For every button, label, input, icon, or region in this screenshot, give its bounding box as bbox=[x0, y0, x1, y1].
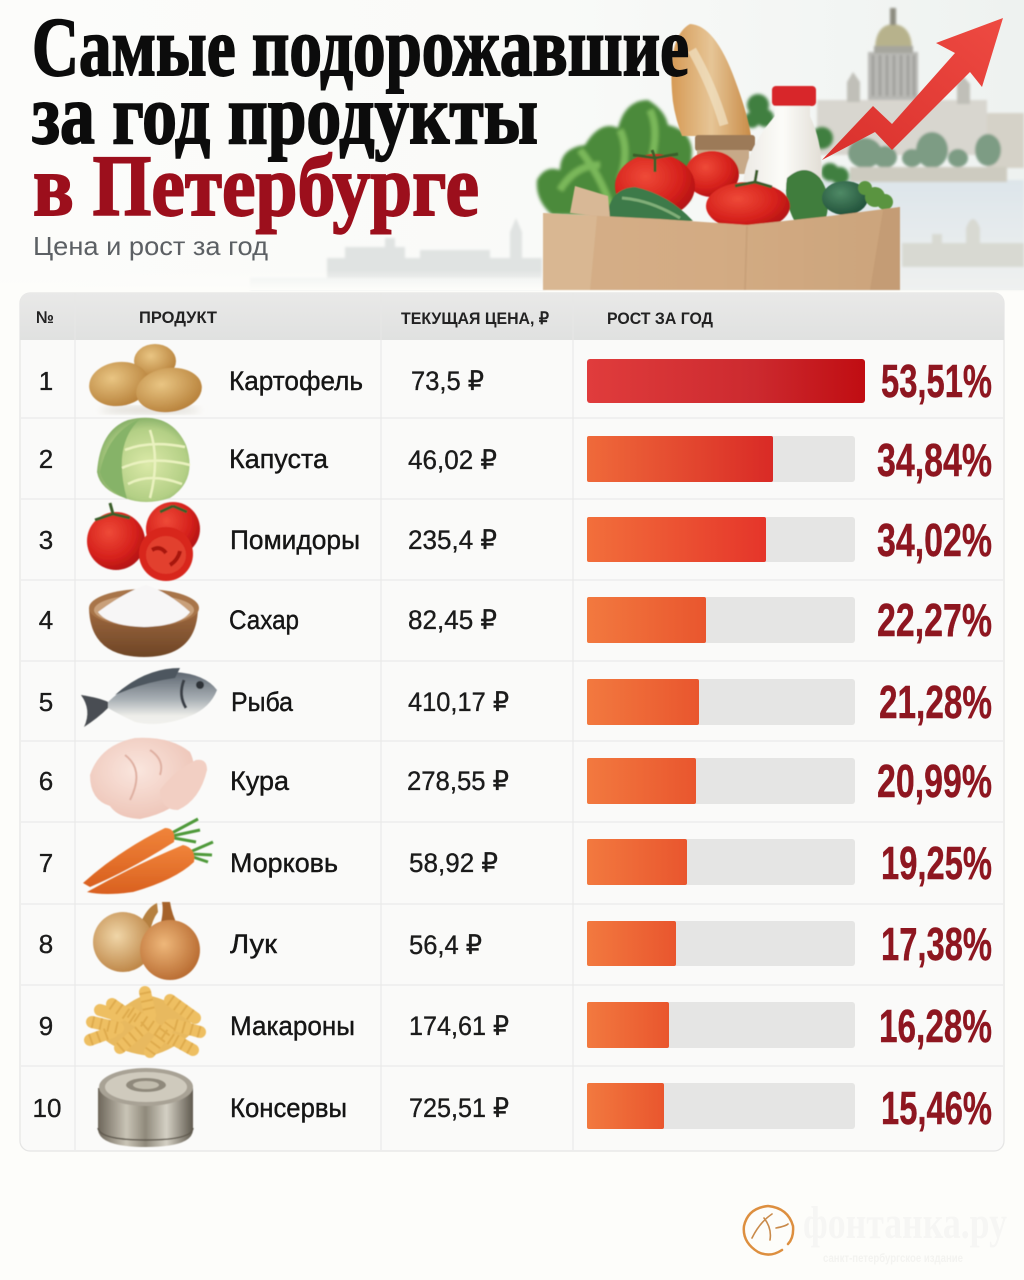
footer wordmark: санкт-петербургское издание bbox=[823, 1251, 963, 1265]
cucumber bbox=[608, 187, 693, 221]
baguette bbox=[671, 24, 751, 136]
title: за год продукты bbox=[32, 68, 538, 162]
table header: ТЕКУЩАЯ ЦЕНА, ₽ bbox=[401, 309, 549, 328]
icon: red rising arrow bbox=[822, 18, 1003, 160]
icon: bowl of sugar bbox=[89, 585, 199, 657]
row 1: potatoes bbox=[39, 344, 992, 416]
right leaves and melon bbox=[786, 170, 828, 222]
bar: 16,28% bbox=[587, 1002, 855, 1048]
row 1: potatoes: Картофель bbox=[229, 366, 363, 396]
row 6: chicken: 6 bbox=[39, 766, 53, 796]
trees bbox=[848, 132, 1001, 168]
bar: 15,46% bbox=[587, 1083, 855, 1129]
row 9: pasta: Макароны bbox=[230, 1011, 355, 1041]
row 4: sugar: 82,45 ₽ bbox=[408, 605, 497, 635]
row 2: cabbage: 2 bbox=[39, 444, 53, 474]
row 6: chicken: 278,55 ₽ bbox=[407, 766, 509, 796]
icon: potatoes bbox=[86, 344, 205, 416]
row 7: carrots bbox=[39, 819, 992, 894]
icon: onions bbox=[93, 902, 200, 980]
table header: РОСТ ЗА ГОД bbox=[607, 309, 713, 328]
row 1: potatoes: 1 bbox=[39, 366, 53, 396]
jar bbox=[695, 135, 755, 151]
bar: 22,27% bbox=[587, 597, 855, 643]
row 4: sugar: 4 bbox=[39, 605, 53, 635]
title bbox=[32, 1, 689, 234]
icon: carrots bbox=[83, 819, 213, 894]
table header bbox=[20, 293, 1004, 340]
title: Самые подорожавшие bbox=[32, 1, 689, 94]
row 5: fish: 5 bbox=[39, 687, 53, 717]
icon: tomatoes bbox=[87, 502, 200, 581]
bar: 34,84% bbox=[587, 436, 855, 482]
back leaves and left leaf cluster bbox=[537, 94, 849, 215]
row 4: sugar: Сахар bbox=[229, 605, 299, 635]
row 5: fish: Рыба bbox=[231, 687, 294, 717]
icon: cabbage bbox=[97, 418, 190, 502]
row 10: canned food: Консервы bbox=[230, 1093, 347, 1123]
row 3: tomatoes bbox=[39, 502, 992, 581]
icon: pasta bbox=[90, 992, 200, 1056]
bar: 34,02% bbox=[587, 517, 855, 562]
milk bottle bbox=[743, 105, 822, 192]
row 7: carrots: 7 bbox=[39, 848, 53, 878]
row 3: tomatoes: 3 bbox=[39, 525, 53, 555]
row 1: potatoes: 73,5 ₽ bbox=[411, 366, 484, 396]
row 8: onions: 56,4 ₽ bbox=[409, 930, 482, 960]
bar: 20,99% bbox=[587, 758, 855, 804]
icon: chicken bbox=[90, 738, 207, 819]
row 2: cabbage: 46,02 ₽ bbox=[408, 445, 497, 475]
bridge bbox=[850, 167, 1007, 182]
row 10: canned food bbox=[33, 1068, 992, 1147]
tomatoes bbox=[685, 151, 739, 197]
subtitle: Цена и рост за год bbox=[33, 231, 268, 261]
table header: № bbox=[36, 308, 54, 327]
main building bbox=[817, 100, 987, 155]
bag body bbox=[570, 186, 610, 218]
icon: grocery bag bbox=[537, 24, 900, 290]
row 10: canned food: 725,51 ₽ bbox=[409, 1093, 509, 1123]
row 8: onions: 8 bbox=[39, 929, 53, 959]
bar: 21,28% bbox=[587, 679, 855, 725]
row 3: tomatoes: Помидоры bbox=[230, 525, 360, 555]
row 9: pasta: 9 bbox=[39, 1011, 53, 1041]
row 8: onions bbox=[39, 902, 992, 980]
row 9: pasta bbox=[39, 992, 992, 1056]
row 7: carrots: 58,92 ₽ bbox=[409, 848, 498, 878]
panel: table bbox=[20, 293, 1004, 1151]
row 7: carrots: Морковь bbox=[230, 848, 338, 878]
row 3: tomatoes: 235,4 ₽ bbox=[408, 525, 497, 555]
row 2: cabbage bbox=[39, 418, 992, 502]
row 4: sugar bbox=[39, 585, 992, 657]
row 6: chicken: Кура bbox=[230, 766, 290, 796]
bar: 17,38% bbox=[587, 921, 855, 966]
row 2: cabbage: Капуста bbox=[229, 444, 329, 474]
icon: tin can bbox=[98, 1068, 193, 1147]
cathedral bbox=[868, 52, 918, 100]
icon: logo bbox=[744, 1206, 793, 1255]
row 5: fish: 410,17 ₽ bbox=[408, 687, 509, 717]
row 9: pasta: 174,61 ₽ bbox=[409, 1011, 509, 1041]
icon: fish bbox=[81, 668, 217, 727]
lower skyline right bbox=[902, 219, 1024, 267]
row 8: onions: Лук bbox=[230, 929, 277, 959]
bar: 19,25% bbox=[587, 839, 855, 885]
background skyline: St Petersburg bbox=[250, 8, 1024, 290]
row 10: canned food: 10 bbox=[33, 1093, 61, 1123]
lower skyline left bbox=[327, 218, 542, 278]
row 5: fish bbox=[39, 668, 992, 728]
bar: 53,51% bbox=[587, 359, 865, 403]
title: в Петербурге bbox=[33, 137, 479, 234]
row 6: chicken bbox=[39, 738, 992, 819]
table header: ПРОДУКТ bbox=[139, 308, 218, 327]
